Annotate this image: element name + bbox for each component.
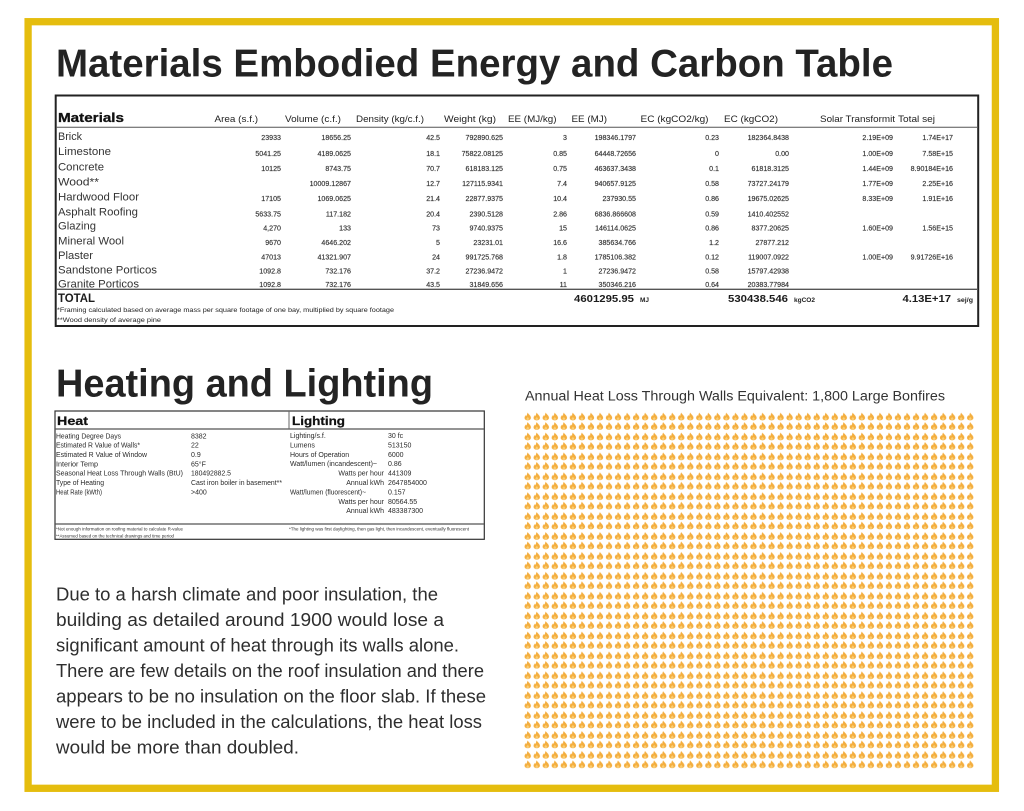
heat rows: Seasonal Heat Loss Through Walls (BtU) [56, 471, 183, 478]
row: limestone: 4189.0625 [317, 150, 351, 158]
lighting rows: Hours of Operation [290, 452, 349, 459]
title: Materials Embodied Energy and Carbon Table [56, 42, 893, 86]
row: brick: 3 [563, 134, 567, 142]
paragraph: heat loss explanation: significant amount of heat through its walls alone. [56, 634, 459, 655]
row: totals: 530438.546 [728, 294, 788, 305]
heat and lighting footnotes [56, 527, 470, 538]
row: glazing: Glazing [58, 221, 96, 233]
lighting rows: 80564.55 [388, 499, 417, 506]
row: concrete: 70.7 [426, 165, 440, 173]
heat and lighting footnotes: **Assumed based on the technical drawings and time period [56, 533, 175, 538]
row: granite porticos: 11 [560, 281, 567, 289]
lighting rows: 2647854000 [388, 480, 427, 487]
row: mineral wool: 5 [436, 239, 440, 247]
row: brick: 42.5 [426, 134, 440, 142]
heat rows: 65°F [191, 460, 206, 468]
row: plaster: 119007.0922 [748, 254, 789, 262]
row: brick: Brick [58, 131, 82, 143]
lighting rows: Lighting/s.f. [290, 433, 326, 440]
row: wood: 2.25E+16 [922, 180, 953, 188]
row: wood: 7.4 [557, 180, 567, 188]
row: sandstone porticos: 732.176 [325, 268, 351, 276]
row: asphalt roofing: 117.182 [326, 210, 351, 218]
row: limestone: 64448.72656 [595, 150, 636, 158]
row: wood: Wood** [58, 176, 100, 188]
row: sandstone porticos: 37.2 [426, 268, 440, 276]
row: granite porticos: 350346.216 [599, 281, 636, 289]
lighting rows: Annual kWh [346, 480, 384, 487]
row: limestone: 5041.25 [255, 150, 281, 158]
row: asphalt roofing: Asphalt Roofing [58, 207, 138, 219]
row: plaster [58, 250, 953, 262]
row: granite porticos: 732.176 [325, 281, 351, 289]
row: wood: 0.58 [705, 180, 719, 188]
row: asphalt roofing: 2.86 [553, 210, 567, 218]
row: mineral wool [58, 236, 789, 248]
row: totals: 4601295.95 [574, 294, 634, 305]
heat rows: Heating Degree Days [56, 433, 121, 440]
row: hardwood floor: 1069.0625 [317, 195, 351, 203]
row: limestone: 7.58E+15 [922, 150, 953, 158]
table header row: Density (kg/c.f.) [356, 114, 424, 125]
row: hardwood floor: Hardwood Floor [58, 192, 139, 204]
row: concrete: 1.44E+09 [862, 165, 893, 173]
row: totals [58, 293, 973, 305]
heat rows: Heat Rate (kWth) [56, 489, 102, 496]
row: brick: 2.19E+09 [862, 134, 893, 142]
heat and lighting footnotes: *The lighting was first daylighting, then gas light, then incandescent, eventually fluorescent [289, 527, 470, 532]
row: glazing: 1.60E+09 [862, 224, 893, 232]
row: granite porticos: 31849.656 [469, 281, 503, 289]
row: concrete: 0.75 [553, 165, 567, 173]
paragraph: heat loss explanation: would be more than doubled. [55, 736, 299, 757]
row: hardwood floor: 10.4 [553, 195, 567, 203]
lighting rows: 0.86 [388, 461, 402, 468]
row: wood: 73727.24179 [748, 180, 789, 188]
caption: bonfire equivalent: Annual Heat Loss Through Walls Equivalent: 1,800 Large Bonfires [525, 388, 945, 404]
row: sandstone porticos: 27236.9472 [466, 268, 503, 276]
lighting rows: Annual kWh [346, 508, 384, 515]
row: granite porticos: 20383.77984 [748, 281, 789, 289]
row: sandstone porticos: 15797.42938 [748, 268, 789, 276]
table header row: Weight (kg) [444, 114, 496, 125]
heat rows: Interior Temp [56, 461, 98, 468]
table header row [58, 111, 935, 125]
row: asphalt roofing: 2390.5128 [469, 210, 503, 218]
row: plaster: 1.8 [557, 254, 567, 262]
heat rows: Estimated R Value of Walls* [56, 443, 140, 450]
row: granite porticos: Granite Porticos [58, 278, 140, 290]
row: sandstone porticos [58, 264, 789, 276]
paragraph: heat loss explanation: Due to a harsh climate and poor insulation, the [56, 584, 438, 605]
row: mineral wool: 1.2 [709, 239, 719, 247]
row: concrete: 463637.3438 [595, 165, 636, 173]
panel: materials table [56, 96, 978, 326]
row: glazing: 73 [432, 224, 440, 232]
row: brick: 23933 [261, 134, 281, 142]
row: hardwood floor: 237930.55 [602, 195, 636, 203]
lighting rows: 483387300 [388, 508, 423, 515]
row: wood: 127115.9341 [462, 180, 503, 188]
row: glazing: 1.56E+15 [922, 224, 953, 232]
row: wood: 12.7 [426, 180, 440, 188]
paragraph: heat loss explanation: There are few details on the roof insulation and there [56, 660, 484, 681]
row: asphalt roofing: 0.59 [705, 210, 719, 218]
row: totals: 4.13E+17 [902, 294, 951, 305]
table footnotes [57, 307, 394, 324]
lighting rows [290, 433, 427, 515]
row: asphalt roofing: 6836.866608 [595, 210, 636, 218]
row: mineral wool: 9670 [265, 239, 281, 247]
table header row: EC (kgCO2/kg) [640, 114, 708, 125]
row: brick: 0.23 [705, 134, 719, 142]
table header row: EE (MJ/kg) [508, 114, 556, 125]
row: hardwood floor: 1.91E+16 [922, 195, 953, 203]
row: asphalt roofing: 5633.75 [255, 210, 281, 218]
lighting rows: Watts per hour [338, 499, 385, 506]
heat header: Heat [57, 414, 88, 428]
heat rows: Estimated R Value of Window [56, 452, 148, 459]
row: brick: 182364.8438 [748, 134, 789, 142]
row: hardwood floor: 19675.02625 [748, 195, 789, 203]
row: concrete: 10125 [261, 165, 281, 173]
row: mineral wool: 16.6 [553, 239, 567, 247]
row: asphalt roofing: 20.4 [426, 210, 440, 218]
row: wood: 10009.12867 [310, 180, 351, 188]
heat rows: Cast iron boiler in basement** [191, 480, 282, 487]
row: brick: 792890.625 [466, 134, 503, 142]
row: totals: TOTAL [58, 293, 95, 305]
table footnotes: **Wood density of average pine [57, 317, 161, 324]
row: sandstone porticos: 27236.9472 [599, 268, 636, 276]
row: limestone: Limestone [58, 146, 111, 158]
row: limestone: 0 [715, 150, 719, 158]
row: asphalt roofing [58, 207, 789, 219]
row: hardwood floor: 17105 [261, 195, 281, 203]
row: concrete: 8.90184E+16 [911, 165, 953, 173]
table header row: EC (kgCO2) [724, 114, 778, 125]
row: plaster: 991725.768 [466, 254, 503, 262]
heading: heating and lighting: Heating and Lighting [56, 362, 433, 406]
row: granite porticos [58, 278, 789, 290]
lighting rows: 30 fc [388, 433, 404, 440]
lighting rows: 6000 [388, 452, 404, 459]
row: glazing: 0.86 [705, 224, 719, 232]
paragraph: heat loss explanation: were to be included in the calculations, the heat loss [55, 711, 482, 732]
row: plaster: 24 [432, 254, 440, 262]
heat rows: 8382 [191, 433, 207, 440]
table header row: Solar Transformit [820, 114, 895, 125]
heat and lighting footnotes: *Not enough information on roofing material to calculate R-value [56, 527, 184, 532]
heat rows: 22 [191, 443, 199, 450]
row: mineral wool: 23231.01 [473, 239, 503, 247]
row: plaster: 1.00E+09 [862, 254, 893, 262]
table header row: Area (s.f.) [214, 114, 258, 125]
row: wood: 1.77E+09 [862, 180, 893, 188]
lighting rows: 0.157 [388, 489, 406, 496]
row: sandstone porticos: 0.58 [705, 268, 719, 276]
row: plaster: 9.91726E+16 [911, 254, 953, 262]
row: sandstone porticos: Sandstone Porticos [58, 264, 158, 276]
row: concrete: Concrete [58, 162, 104, 174]
table footnotes: *Framing calculated based on average mass per square footage of one bay, multiplied by square footage [57, 307, 394, 314]
row: mineral wool: 27877.212 [755, 239, 789, 247]
paragraph: heat loss explanation [55, 584, 486, 757]
row: granite porticos: 1092.8 [259, 281, 281, 289]
paragraph: heat loss explanation: building as detailed around 1900 would lose a [56, 609, 445, 630]
lighting rows: Lumens [290, 442, 315, 449]
row: brick [58, 131, 953, 143]
table header row: Materials [58, 111, 124, 125]
row: concrete: 0.1 [709, 165, 719, 173]
row: glazing: 4,270 [263, 224, 281, 232]
row: plaster: 0.12 [705, 254, 719, 262]
row: concrete: 8743.75 [325, 165, 351, 173]
heat rows: 0.9 [191, 452, 201, 459]
row: wood [58, 176, 953, 188]
row: hardwood floor [58, 192, 953, 204]
row: plaster: 1785106.382 [595, 254, 636, 262]
heat rows [56, 433, 282, 496]
row: concrete: 61818.3125 [752, 165, 789, 173]
row: glazing: 133 [339, 224, 351, 232]
row: plaster: 47013 [261, 254, 281, 262]
table header row: EE (MJ) [572, 114, 607, 125]
heat rows: Type of Heating [56, 480, 104, 487]
row: plaster: Plaster [58, 250, 93, 262]
row: mineral wool: 385634.766 [599, 239, 636, 247]
row: glazing [58, 221, 953, 233]
row: totals: kgCO2 [794, 298, 816, 304]
table header row: Total sej [898, 114, 935, 125]
row: plaster: 41321.907 [317, 254, 351, 262]
row: granite porticos: 0.64 [705, 281, 719, 289]
row: sandstone porticos: 1092.8 [259, 268, 281, 276]
pictogram: 1,800 flame icons, 50 columns by 36 rows [523, 412, 975, 770]
row: asphalt roofing: 1410.402552 [748, 210, 789, 218]
row: sandstone porticos: 1 [563, 268, 567, 276]
row: mineral wool: 4646.202 [321, 239, 351, 247]
row: brick: 1.74E+17 [922, 134, 953, 142]
lighting header: Lighting [292, 414, 345, 428]
row: wood: 940657.9125 [595, 180, 636, 188]
row: limestone [58, 146, 953, 158]
row: brick: 198346.1797 [595, 134, 636, 142]
row: brick: 18656.25 [321, 134, 351, 142]
row: hardwood floor: 22877.9375 [466, 195, 503, 203]
row: glazing: 15 [559, 224, 567, 232]
heat rows: 180492882.5 [191, 471, 231, 478]
row: concrete: 618183.125 [466, 165, 503, 173]
row: limestone: 0.85 [553, 150, 567, 158]
lighting rows: Watt/lumen (incandescent)~ [290, 461, 377, 468]
row: limestone: 1.00E+09 [862, 150, 893, 158]
row: limestone: 0.00 [775, 150, 789, 158]
lighting rows: Watts per hour [338, 471, 385, 478]
row: hardwood floor: 21.4 [426, 195, 440, 203]
row: hardwood floor: 8.33E+09 [862, 195, 893, 203]
table header row: Volume (c.f.) [285, 114, 341, 125]
heat rows: >400 [191, 489, 207, 496]
row: mineral wool: Mineral Wool [58, 236, 124, 248]
lighting rows: 513150 [388, 442, 411, 449]
row: limestone: 18.1 [426, 150, 440, 158]
row: glazing: 146114.0625 [595, 224, 636, 232]
lighting rows: 441309 [388, 471, 411, 478]
lighting rows: Watt/lumen (fluorescent)~ [290, 489, 366, 496]
row: totals: MJ [640, 298, 649, 304]
paragraph: heat loss explanation: appears to be no insulation on the floor slab. If these [56, 685, 486, 706]
row: granite porticos: 43.5 [426, 281, 440, 289]
row: totals: sej/g [957, 298, 973, 304]
panel: heat and lighting table [55, 411, 484, 539]
row: glazing: 8377.20625 [752, 224, 789, 232]
row: limestone: 75822.08125 [462, 150, 503, 158]
row: glazing: 9740.9375 [469, 224, 503, 232]
row: hardwood floor: 0.86 [705, 195, 719, 203]
row: concrete [58, 162, 953, 174]
